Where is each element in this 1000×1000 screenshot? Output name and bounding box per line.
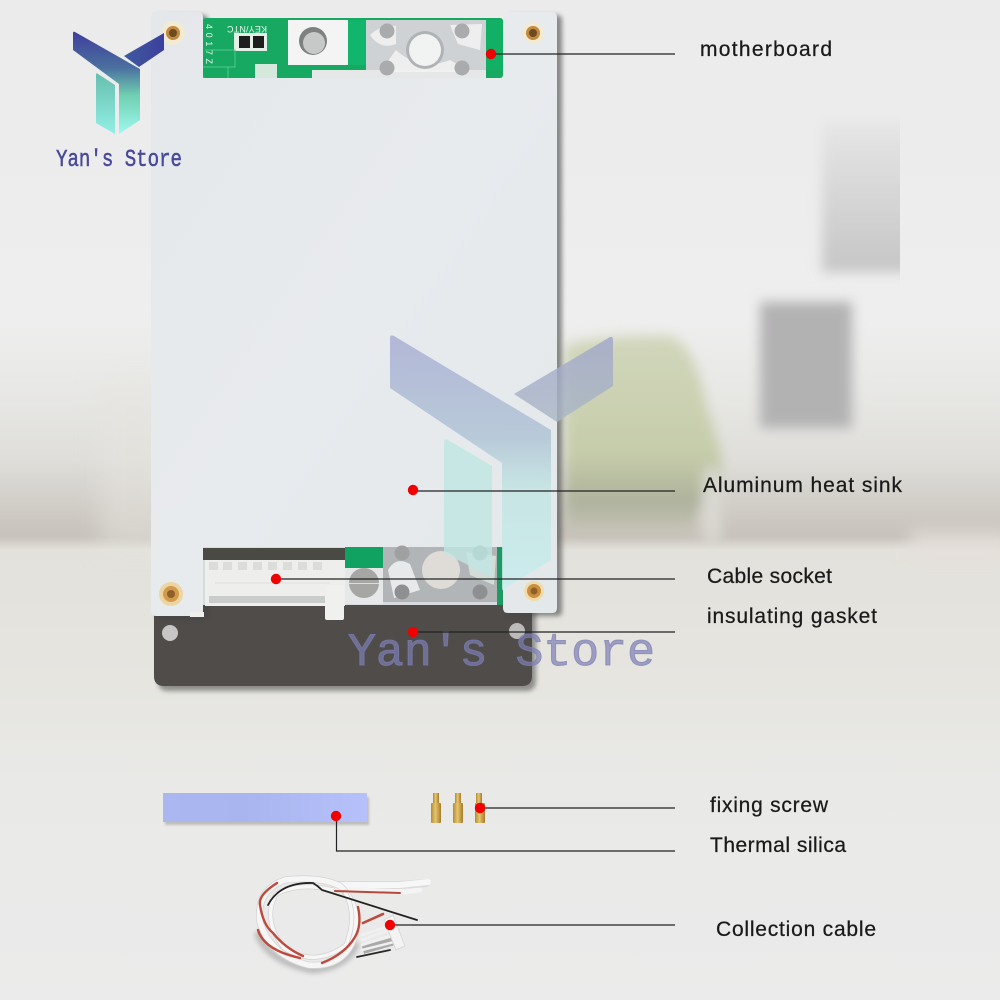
silkscreen text: KEY/NTC <box>226 24 267 34</box>
brass mounting inserts <box>159 21 544 606</box>
watermark store name: Yan's Store <box>348 627 655 679</box>
label: fixing screw: fixing screw <box>710 794 829 817</box>
silkscreen revision: 4017Z <box>204 24 214 64</box>
insulating gasket <box>154 602 536 691</box>
thermal silica strip <box>163 793 369 825</box>
aluminum heat sink plate <box>151 12 562 619</box>
logo mark <box>73 32 164 134</box>
label: cable socket: Cable socket <box>707 565 832 588</box>
label: thermal silica: Thermal silica <box>710 834 846 857</box>
top PCB motherboard window <box>203 18 503 78</box>
leader lines <box>276 54 675 925</box>
label: collection cable: Collection cable <box>716 918 876 941</box>
label: motherboard: motherboard <box>700 38 832 61</box>
logo store name: Yan's Store <box>56 147 182 174</box>
label: insulating gasket: insulating gasket <box>707 605 877 628</box>
collection cable bundle <box>258 879 428 970</box>
large translucent watermark logo <box>390 335 613 590</box>
white cable socket connector <box>190 560 345 620</box>
label: aluminum heat sink: Aluminum heat sink <box>703 474 902 497</box>
blurred room background <box>0 134 1000 736</box>
fixing screws <box>431 793 485 823</box>
bottom PCB with cable socket <box>203 546 503 605</box>
red marker dots <box>271 49 496 930</box>
logo <box>56 32 182 174</box>
callout labels <box>700 38 902 941</box>
heat sink and board assembly <box>151 12 562 691</box>
